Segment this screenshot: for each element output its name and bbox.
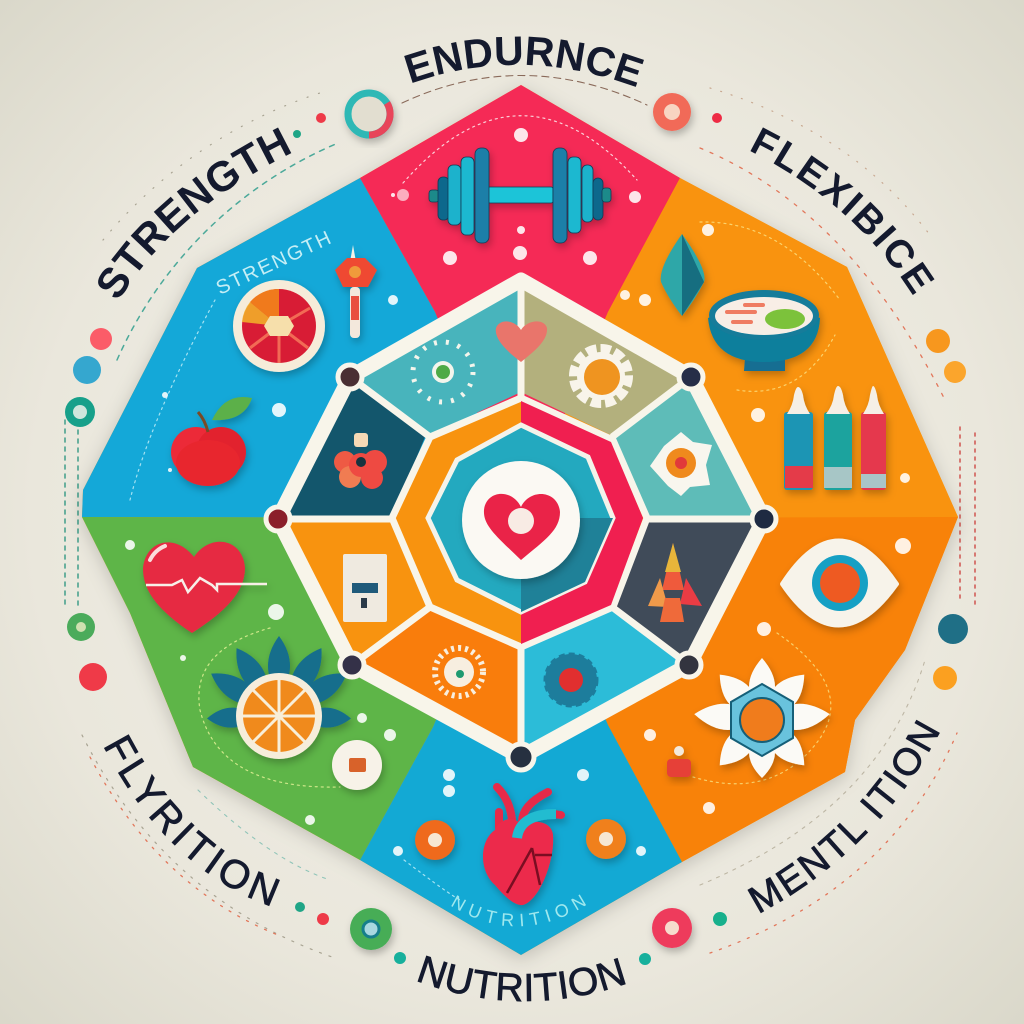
icon: faded heart [496,321,547,362]
heading: endurance: ENDURNCE [404,36,644,87]
panel flourish lines [130,116,840,900]
heading: nutrition: NUTRITION [418,956,626,1002]
icon: three tubes [784,386,886,490]
icon: red flower [334,433,387,489]
heading: strength: STRENGTH [98,128,292,298]
sub-label: strength: STRENGTH [213,226,336,300]
ring icon: top right [653,93,691,131]
panel: endurance red [360,85,680,518]
wheel segment: top left teal [355,285,521,437]
panel: flyrition green [82,517,521,860]
icon: daisy right [650,432,712,496]
wheel segment: bottom right blue [521,607,684,750]
panel: nutrition bottom blue [360,518,682,955]
wheel segment: right upper teal [615,380,757,517]
inner wheel [266,280,776,770]
panel: strength blue [82,178,521,518]
outer accent dots [65,113,968,965]
icon: eye [782,540,897,626]
icon: nutrition dot left [415,820,455,860]
icon: apple [171,397,252,486]
wheel segment: top right olive [521,285,687,437]
icon: anatomical heart [483,787,561,905]
ring: orange and red [392,398,647,647]
icon: switch panel [343,554,387,622]
icon: nutrition dot right [586,819,626,859]
ring: teal [428,425,613,612]
icon: daisy top [577,352,625,400]
ring icon: top left [348,93,390,135]
icon: orange slice with leaves [205,636,353,759]
heading: mental: MENTL ITION [747,720,940,914]
wheel segment: bottom left orange [358,607,521,750]
centre disc [462,461,580,579]
heading: flexibility: FLEXIBICE [750,127,934,295]
ring icon: bottom right [652,908,692,948]
panel: flexibility orange [521,178,958,518]
decorative dotted orbit lines [65,75,975,958]
panel: mental orange [521,517,958,862]
icon: dumbbell [429,148,611,243]
ring icon: bottom left [350,908,392,950]
icon: bowl [708,290,820,371]
icon: lotus [693,658,831,778]
icon: teal leaf [661,234,705,316]
icon: small red cup [667,746,691,777]
icon: sun burst [435,648,483,696]
icon: centre heart [484,494,560,560]
icon: rocket shape [648,543,702,622]
panel speckles [125,128,911,856]
wheel nodes [266,365,776,770]
heading: flyrition: FLYRITION [104,734,280,906]
icon: citrus wheel red [233,280,325,372]
wheel segment: right lower slate [615,519,757,662]
wheel frame [278,280,764,757]
icon: eye sunburst [413,342,473,402]
icon: key pin [335,245,377,338]
icon: blue gear [545,654,597,706]
sub-label: nutrition: NUTRITION [451,894,586,926]
icon: heart with pulse [143,542,267,633]
wheel segment: left upper dark teal [285,380,425,517]
wheel segment: left lower orange [285,519,430,662]
icon: round token [332,740,382,790]
octagon shadow [82,85,958,955]
